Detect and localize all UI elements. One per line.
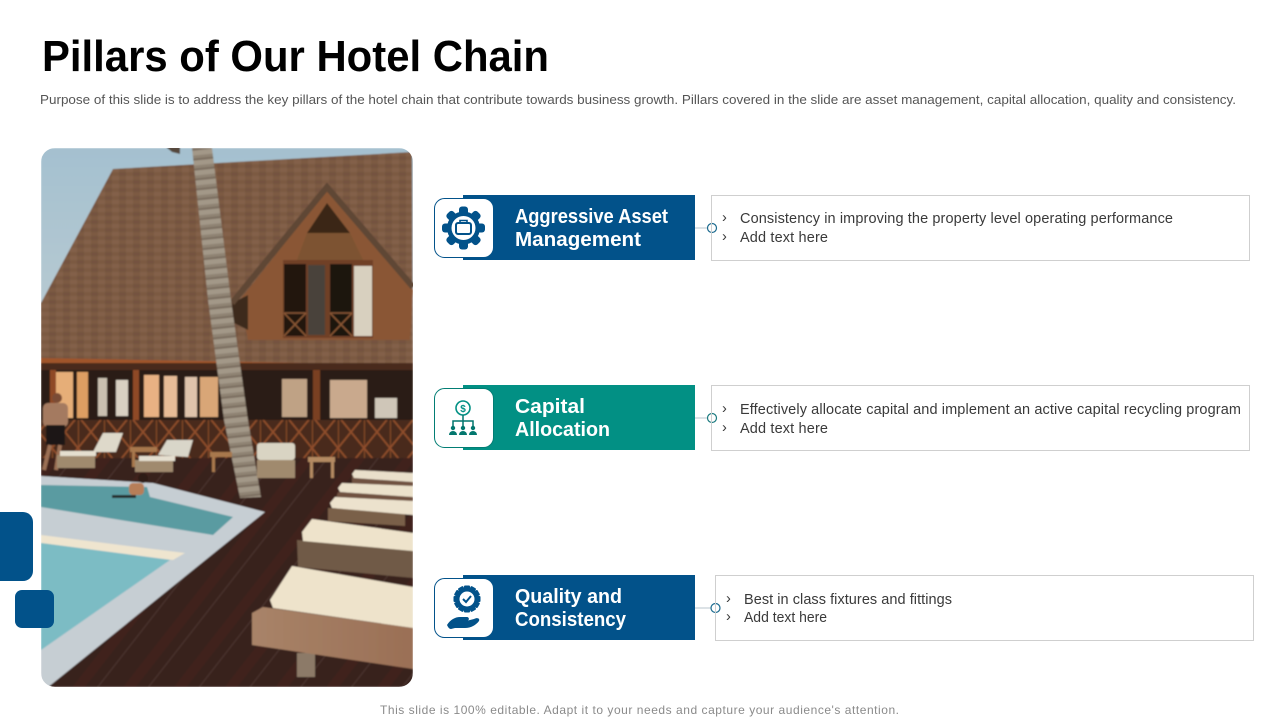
icon: gear with briefcase [442, 206, 485, 250]
text card 3 [716, 576, 1254, 640]
text card 3: › [726, 609, 731, 625]
heading bar 1 [463, 195, 695, 260]
ground floor [41, 358, 413, 425]
text card 1: Add text here [740, 230, 828, 246]
heading text 1: Management [515, 229, 641, 251]
roof [41, 152, 413, 370]
heading text 1: Aggressive Asset [515, 206, 668, 228]
person at left [43, 393, 68, 470]
lower pool water [41, 543, 170, 650]
dormer wall [232, 190, 413, 340]
upper pool water [41, 485, 233, 535]
text card 1: › [722, 229, 727, 245]
swimmer [112, 473, 148, 498]
palm frond [166, 147, 180, 154]
footer note: This slide is 100% editable. Adapt it to your needs and capture your audience's attention. [380, 703, 899, 717]
back loungers and tables [57, 433, 335, 478]
pillar 1: aggressive asset management [434, 195, 1250, 260]
icon tile 2 [434, 388, 494, 448]
text card 1: › [722, 210, 727, 226]
decorative block: small blue square [15, 590, 54, 628]
heading bar 2 [463, 385, 695, 450]
pillar 3: quality and consistency [434, 575, 1254, 640]
text card 1: Consistency in improving the property level operating performance [740, 211, 1173, 227]
subtitle description: Purpose of this slide is to address the key pillars of the hotel chain that contribute towards business growth. Pillars covered in the slide are asset management, capital allocation, quality and consistency. [40, 92, 1236, 107]
icon: dollar hierarchy: $ [460, 404, 466, 415]
text card 2: › [722, 401, 727, 417]
right loungers [252, 470, 413, 677]
text card 3: Best in class fixtures and fittings [744, 592, 952, 608]
title: Pillars of Our Hotel Chain [42, 32, 549, 81]
text card 2: › [722, 420, 727, 436]
text card 2 [712, 386, 1250, 450]
icon: dollar hierarchy [449, 401, 477, 435]
pool surround [41, 476, 265, 688]
text card 2: Add text here [740, 421, 828, 437]
icon: quality badge on hand [447, 586, 480, 629]
connector 2 [695, 414, 716, 422]
lower pool ledge [41, 535, 185, 560]
text card 3: › [726, 591, 731, 607]
icon tile 3 [434, 578, 494, 638]
deck [41, 458, 413, 687]
icon tile 1 [434, 198, 494, 258]
connector 3 [695, 604, 720, 612]
heading bar 3 [463, 575, 695, 640]
dormer roof edge [232, 187, 413, 303]
pillar 2: capital allocation [434, 385, 1250, 450]
railing [41, 420, 413, 460]
heading text 3: Quality and [515, 586, 622, 608]
heading text 2: Capital [515, 396, 585, 418]
heading text 3: Consistency [515, 609, 627, 631]
palm trunk [192, 148, 261, 498]
text card 2: Effectively allocate capital and implement an active capital recycling program [740, 402, 1241, 418]
connector 1 [695, 224, 716, 232]
photo: hotel with pool [41, 147, 413, 688]
text card 3: Add text here [744, 610, 827, 626]
text card 1 [712, 196, 1250, 260]
heading text 2: Allocation [515, 419, 610, 441]
decorative block: large blue tab [0, 512, 33, 581]
